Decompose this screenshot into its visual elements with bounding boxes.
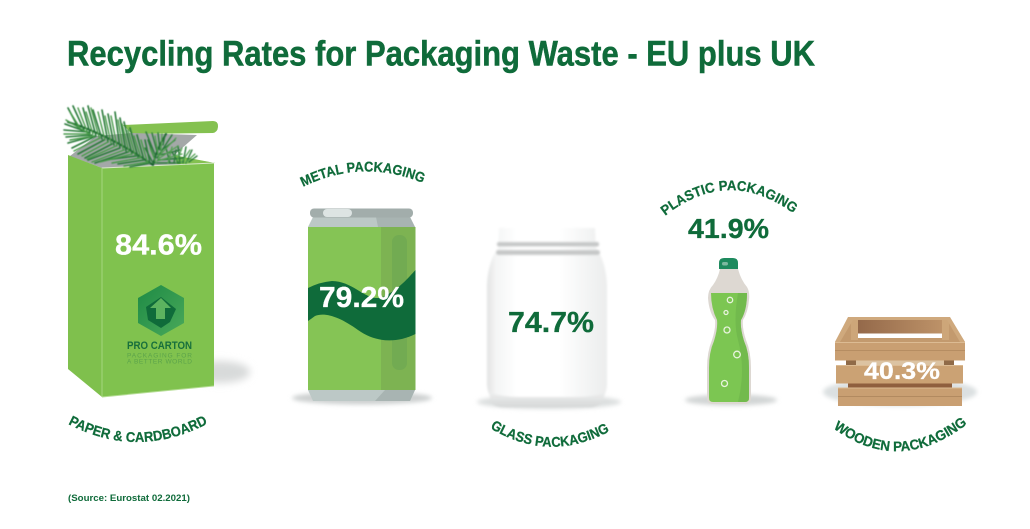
bottle shadow — [685, 394, 777, 406]
can wave — [308, 270, 416, 340]
can shadow — [292, 392, 432, 404]
bubbles — [722, 297, 740, 386]
bottle — [707, 258, 751, 404]
box inner flap — [173, 155, 215, 165]
jar — [487, 228, 607, 407]
crate — [835, 317, 965, 406]
pine branch — [64, 106, 197, 167]
pro carton logo: PRO CARTON — [127, 340, 192, 352]
box front face — [102, 163, 214, 397]
can — [308, 208, 416, 401]
box left face — [68, 155, 102, 397]
source note: (Source: Eurostat 02.2021) — [68, 493, 190, 504]
label metal packaging: METAL PACKAGING — [300, 162, 425, 187]
label wooden packaging: WOODEN PACKAGING — [835, 418, 966, 452]
crate shadow — [823, 378, 977, 406]
panel: paper and cardboard — [62, 104, 252, 442]
label glass packaging: GLASS PACKAGING — [492, 421, 608, 447]
crate top plank — [835, 342, 965, 360]
crate middle plank — [836, 365, 963, 384]
box interior — [70, 133, 215, 168]
pro carton logo — [127, 285, 192, 366]
panel: plastic packaging — [660, 180, 797, 408]
bottle cap — [719, 258, 738, 269]
value 74.7%: 74.7% — [508, 307, 594, 339]
value 84.6%: 84.6% — [115, 230, 202, 262]
label plastic packaging: PLASTIC PACKAGING — [660, 180, 797, 216]
box lid — [123, 121, 218, 134]
box shadow — [190, 361, 250, 383]
panel: glass packaging — [477, 228, 621, 447]
label paper and cardboard: PAPER & CARDBOARD — [68, 416, 206, 442]
panel: metal packaging — [292, 162, 432, 406]
pro carton logo: A BETTER WORLD — [127, 358, 192, 366]
crate bottom plank — [838, 388, 962, 406]
jar shadow — [477, 395, 621, 409]
pro carton logo: PACKAGING FOR — [127, 352, 192, 360]
value 41.9%: 41.9% — [688, 213, 769, 244]
panel: wooden packaging — [822, 317, 978, 452]
title: Recycling Rates for Packaging Waste - EU plus UK — [67, 34, 815, 74]
value 40.3%: 40.3% — [864, 358, 940, 385]
crate gaps — [846, 360, 954, 365]
value 79.2%: 79.2% — [319, 282, 404, 314]
